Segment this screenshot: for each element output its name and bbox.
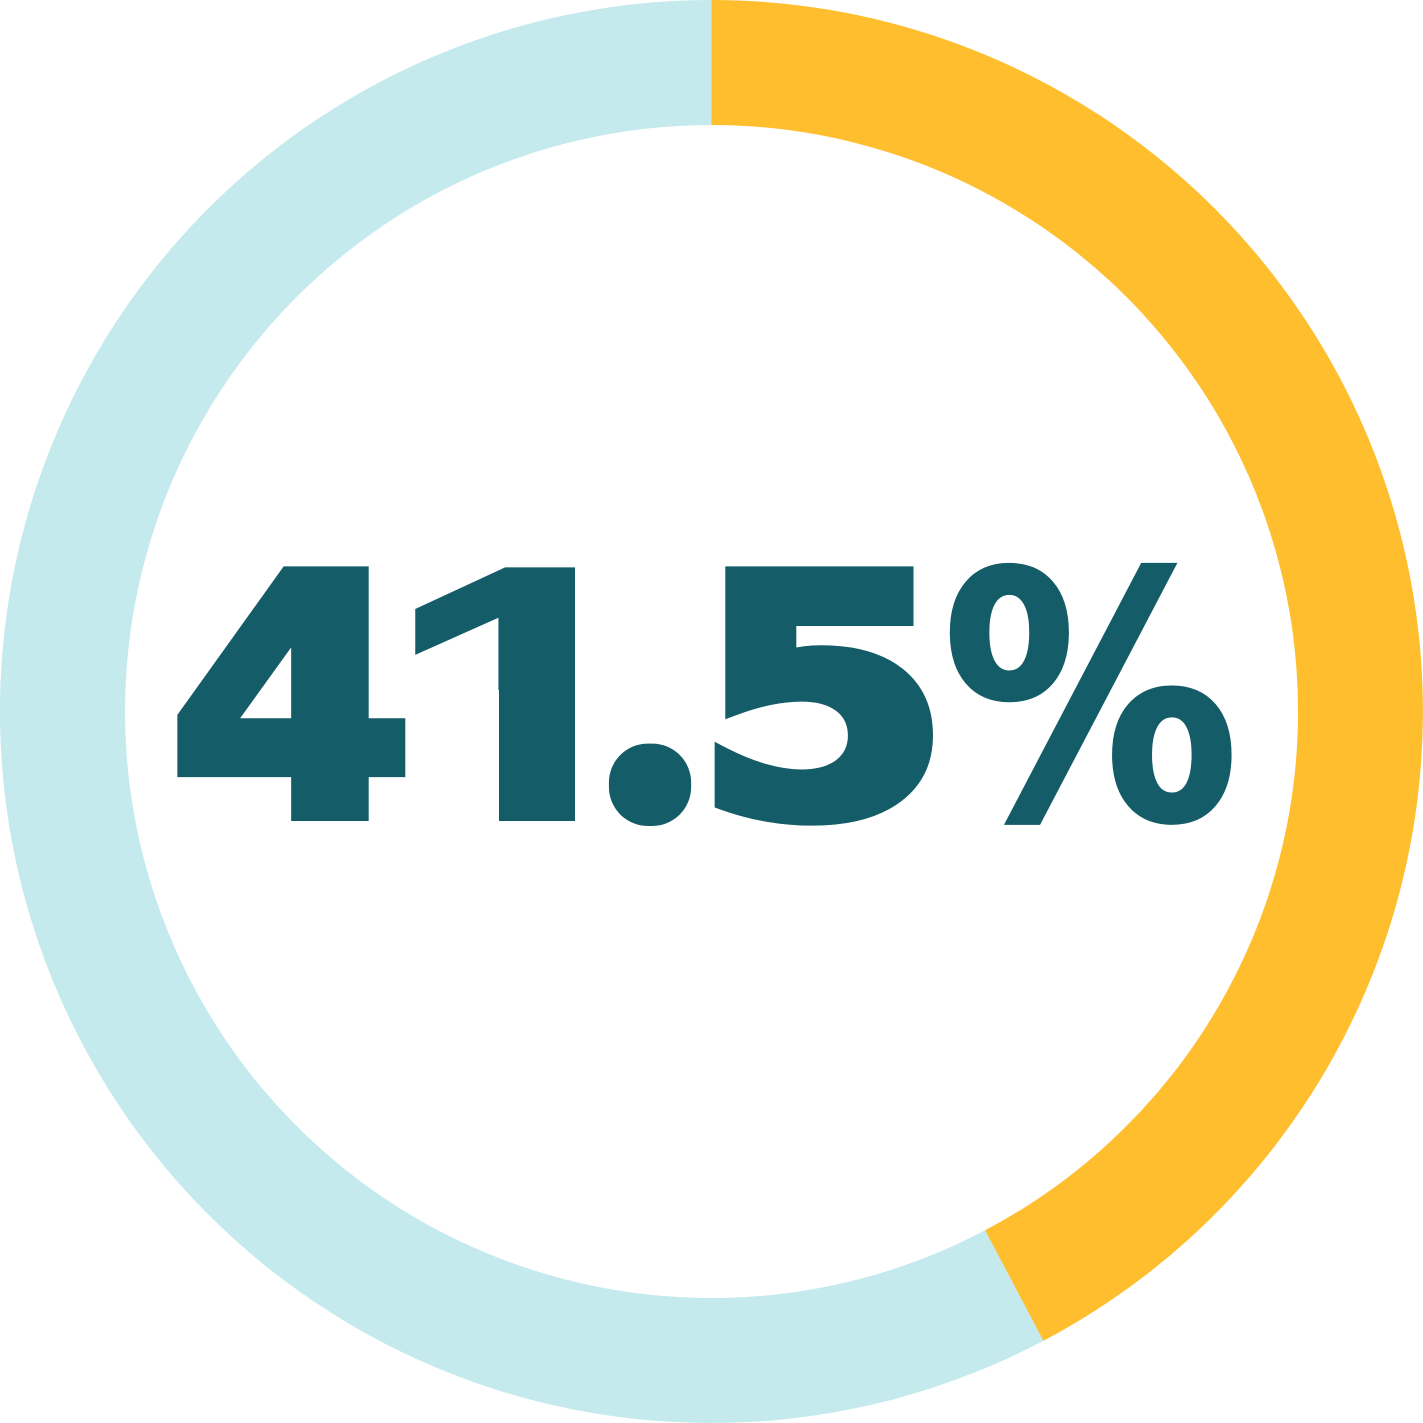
- percentage value: .: [646, 761, 654, 794]
- percentage value: 5: [694, 508, 951, 892]
- percentage value: 1: [385, 492, 665, 894]
- highlighted ring segment: [712, 0, 1423, 1341]
- percentage value: %: [942, 502, 1239, 899]
- percentage value: [177, 562, 1232, 826]
- remaining ring segment: [0, 0, 1043, 1423]
- percentage value: 4: [169, 508, 414, 892]
